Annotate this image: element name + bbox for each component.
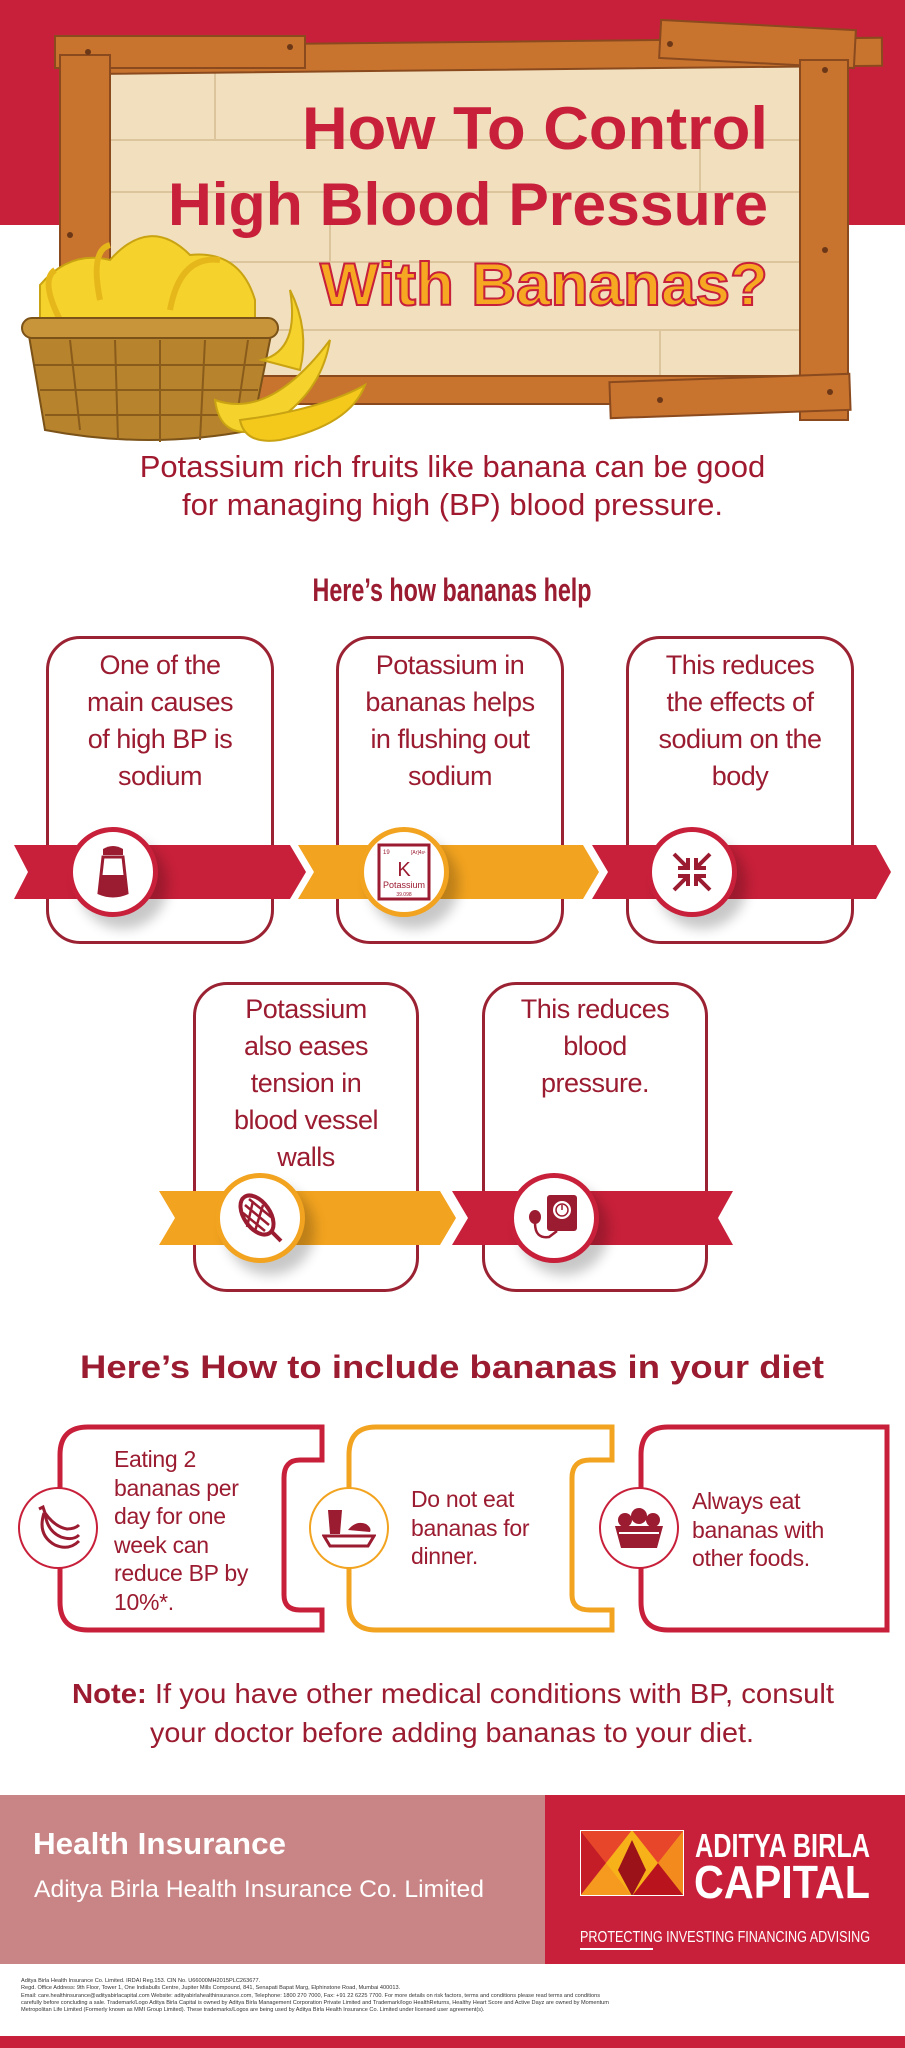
card 3: This reduces (666, 650, 814, 680)
diet item 1: day for one (114, 1503, 226, 1529)
card 5: blood (563, 1031, 627, 1061)
footer: health insurance text (33, 1826, 484, 1903)
title sign board (21, 18, 884, 442)
ribbons (14, 845, 891, 1245)
icon: potassium element: K (397, 859, 411, 881)
footer: health insurance text: Aditya Birla Health Insurance Co. Limited (34, 1876, 484, 1903)
diet item 2: dinner. (411, 1543, 478, 1569)
basket with bananas (22, 236, 365, 442)
small print: Aditya Birla Health Insurance Co. Limited. IRDAI Reg.153. CIN No. U66000MH2015PLC263677. (21, 1978, 260, 1984)
card 4: also eases (244, 1031, 368, 1061)
small print: Regd. Office Address: 9th Floor, Tower 1, One Indiabulls Centre, Jupiter Mills Compound, 841, Senapati Bapat Marg, Elphinstone Road, Mumbai 400013. (21, 1985, 400, 1991)
note: Note: If you have other medical conditions with BP, consult (72, 1678, 834, 1709)
icon: potassium element: 19 (383, 850, 390, 856)
board (108, 66, 805, 384)
card 3 (626, 636, 854, 944)
diet item 2: bananas for (411, 1514, 529, 1540)
wood frame (55, 20, 882, 420)
card 4: walls (277, 1142, 335, 1172)
subtitle: for managing high (BP) blood pressure. (182, 487, 723, 522)
heading: how bananas help: Here’s how bananas help (312, 572, 592, 608)
diet item 1: week can (114, 1532, 209, 1558)
diet item 1: reduce BP by (114, 1560, 248, 1586)
card 4 (193, 982, 419, 1292)
icon: banana bunch (18, 1487, 98, 1569)
icon: salt shaker (68, 827, 158, 917)
title text: How To Control (302, 95, 768, 162)
card 1: main causes (87, 687, 233, 717)
title text: With Bananas? (320, 251, 768, 318)
diet item 1 (18, 1446, 248, 1614)
diet item 3: bananas with (692, 1516, 824, 1542)
card 2: sodium (408, 761, 492, 791)
logo: Aditya Birla Capital (580, 1830, 870, 1950)
card 2: bananas helps (365, 687, 535, 717)
diet item 3: other foods. (692, 1545, 810, 1571)
bottom strip (0, 2036, 905, 2048)
card 3: the effects of (666, 687, 814, 717)
card 5: pressure. (541, 1068, 649, 1098)
icon: potassium element (359, 827, 449, 917)
diet cards outlines (58, 1424, 890, 1632)
card 1: of high BP is (88, 724, 232, 754)
note: your doctor before adding bananas to your diet. (150, 1717, 754, 1748)
subtitle (140, 449, 765, 522)
card 1: One of the (99, 650, 221, 680)
card 4: blood vessel (234, 1105, 378, 1135)
card 4: tension in (251, 1068, 361, 1098)
small print: Email: care.healthinsurance@adityabirlacapital.com Website: adityabirlahealthinsurance.com, Telephone: 1800 270 7000, Fax: +91 22 6225 7700. For more details on risk factors, terms and conditions please read terms and conditions (21, 1993, 600, 1999)
small print: Metropolitan Life Limited (Formerly known as MMI Group Limited). These trademarks/Logos are being used by Aditya Birla Health Insurance Co. Limited under licensed user agreement(s). (21, 2007, 484, 2013)
icon: potassium element: 39.098 (396, 892, 412, 898)
small print (21, 1978, 609, 2013)
card 3: sodium on the (658, 724, 822, 754)
note (72, 1678, 834, 1748)
card 2 (336, 636, 564, 944)
small print: carefully before concluding a sale. Trademark/Logo Aditya Birla Capital is owned by Aditya Birla Management Corporation Private Limited and Trademark/logo HealthReturns, Healthy Heart Score and Active Dayz are owned by Momentum (21, 2000, 609, 2006)
card 4: Potassium (245, 994, 367, 1024)
card 2: Potassium in (376, 650, 524, 680)
diet item 2: Do not eat (411, 1486, 514, 1512)
diet item 1: Eating 2 (114, 1446, 196, 1472)
icon: BP monitor (509, 1173, 599, 1263)
heading: include bananas in diet: Here’s How to include bananas in your diet (80, 1349, 824, 1385)
diet item 3: Always eat (692, 1488, 800, 1514)
icon: compress arrows (647, 827, 737, 917)
diet item 1: 10%*. (114, 1588, 174, 1614)
header red band (0, 0, 905, 225)
title text: High Blood Pressure (168, 171, 768, 238)
diet item 3 (599, 1487, 824, 1571)
footer (0, 1795, 905, 1964)
card 3: body (712, 761, 768, 791)
card 1 (46, 636, 274, 944)
icon: fruit bowl (599, 1487, 679, 1569)
diet item 1: bananas per (114, 1474, 239, 1500)
title text (168, 95, 768, 318)
footer: health insurance text: Health Insurance (33, 1826, 286, 1861)
icon: meal tray (309, 1487, 389, 1569)
card 5: This reduces (521, 994, 669, 1024)
icon: potassium element: Potassium (383, 880, 425, 890)
subtitle: Potassium rich fruits like banana can be good (140, 449, 765, 484)
icon: muscle fibre (215, 1173, 305, 1263)
icon: potassium element: [Ar]4s¹ (411, 850, 426, 856)
card 2: in flushing out (370, 724, 530, 754)
card 5 (482, 982, 708, 1292)
diet item 2 (309, 1486, 530, 1569)
card 1: sodium (118, 761, 202, 791)
